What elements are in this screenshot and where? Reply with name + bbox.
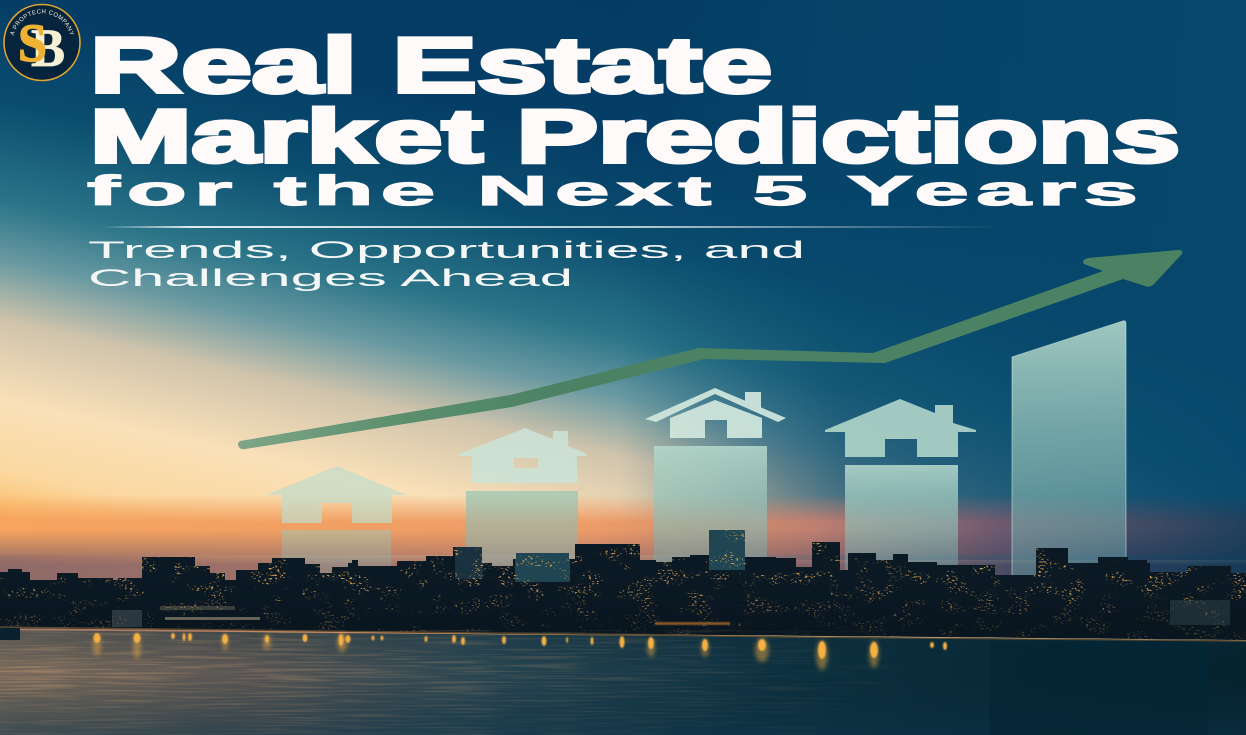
arrow: growth trend line bbox=[238, 250, 1182, 449]
logo monogram: B bbox=[31, 18, 65, 78]
bar 2 bbox=[466, 491, 578, 576]
icon: house 1 bbox=[266, 466, 406, 523]
icon: house 4 bbox=[825, 399, 976, 457]
title line 1: Real Estate bbox=[90, 21, 772, 109]
title line 3: for the Next 5 Years bbox=[87, 167, 1145, 214]
water bbox=[0, 627, 1246, 735]
logo monogram: S bbox=[18, 13, 47, 73]
water light reflections bbox=[93, 632, 947, 670]
title line 2: Market Predictions bbox=[90, 94, 1180, 178]
logo monogram bbox=[18, 13, 65, 78]
subtitle line 1: Trends, Opportunities, and bbox=[88, 237, 805, 264]
logo: SB badge bbox=[3, 4, 81, 82]
bar 4 bbox=[845, 465, 958, 575]
icon: house 3 bbox=[645, 388, 786, 438]
subtitle bbox=[88, 237, 805, 292]
logo tagline: A PROPTECH COMPANY bbox=[10, 9, 74, 36]
chart: rising house price bars bbox=[282, 321, 1126, 578]
subtitle line 2: Challenges Ahead bbox=[88, 265, 573, 292]
bar 3 bbox=[654, 446, 767, 574]
divider bbox=[100, 226, 1000, 228]
bar 5 bbox=[1012, 321, 1126, 578]
bar 1 bbox=[282, 530, 391, 575]
icon: house 2 bbox=[458, 428, 587, 483]
title bbox=[87, 21, 1180, 214]
skyline: city at dusk bbox=[0, 530, 1246, 642]
